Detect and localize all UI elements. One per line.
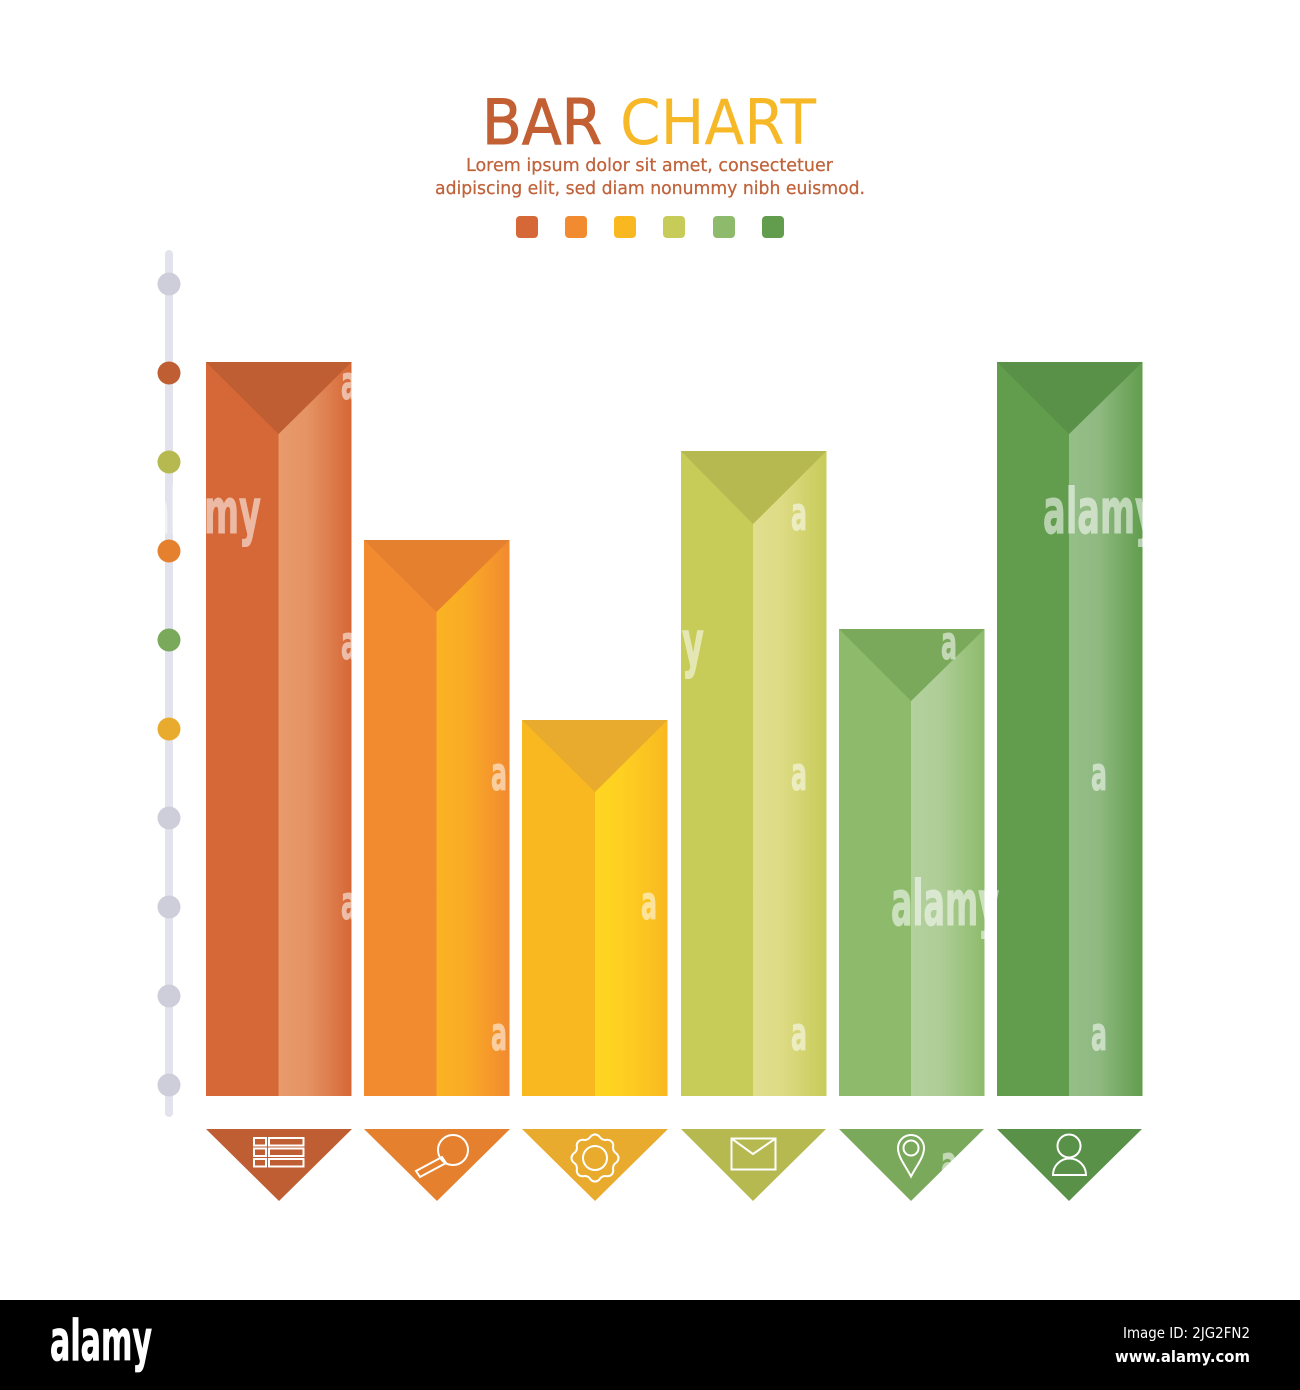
stock watermark overlays: alamy bbox=[891, 867, 999, 940]
subtitle text: Lorem ipsum dolor sit amet, consectetuer bbox=[466, 155, 834, 176]
stock watermark overlays: a bbox=[1091, 747, 1107, 801]
bar 6 bbox=[997, 362, 1142, 1096]
stock watermark overlays: a bbox=[791, 1007, 807, 1061]
stock watermark overlays: a bbox=[1091, 1007, 1107, 1061]
bar 1 bbox=[206, 362, 352, 1096]
title: BAR bbox=[482, 86, 602, 159]
stock watermark overlays: a bbox=[491, 747, 507, 801]
website: www.alamy.com bbox=[1115, 1347, 1250, 1366]
bar 2 bbox=[364, 540, 510, 1096]
stock watermark overlays bbox=[147, 356, 1157, 1190]
footer logo: alamy bbox=[50, 1309, 152, 1374]
subtitle text: adipiscing elit, sed diam nonummy nibh euismod. bbox=[435, 178, 865, 199]
stock watermark overlays: a bbox=[341, 876, 357, 930]
title bbox=[482, 86, 817, 159]
triangle with envelope icon bbox=[681, 1129, 826, 1201]
stock watermark overlays: a bbox=[941, 1136, 957, 1190]
vertical axis with markers bbox=[158, 250, 180, 1117]
triangle with map pin icon bbox=[839, 1129, 984, 1201]
triangle with magnifier icon bbox=[364, 1129, 510, 1201]
legend colour squares bbox=[516, 216, 784, 238]
stock watermark overlays: a bbox=[791, 487, 807, 541]
triangle with gear icon bbox=[522, 1129, 668, 1201]
stock watermark overlays: a bbox=[341, 616, 357, 670]
footer bar bbox=[0, 1300, 1300, 1390]
title: CHART bbox=[620, 86, 817, 159]
triangle with person icon bbox=[997, 1129, 1142, 1201]
stock watermark overlays: a bbox=[941, 616, 957, 670]
stock watermark overlays: a bbox=[491, 1007, 507, 1061]
stock watermark overlays: alamy bbox=[147, 475, 261, 548]
stock watermark overlays: a bbox=[791, 747, 807, 801]
bar 5 bbox=[839, 629, 984, 1096]
stock watermark overlays: alamy bbox=[590, 607, 704, 680]
stock watermark overlays: a bbox=[341, 356, 357, 410]
triangle with table icon bbox=[206, 1129, 352, 1201]
stock watermark overlays: alamy bbox=[1043, 475, 1157, 548]
bar 3 bbox=[522, 720, 668, 1096]
subtitle text bbox=[435, 155, 865, 199]
image id: Image ID: 2JG2FN2 bbox=[1123, 1324, 1250, 1342]
stock watermark overlays: a bbox=[641, 876, 657, 930]
bar 4 bbox=[681, 451, 826, 1096]
